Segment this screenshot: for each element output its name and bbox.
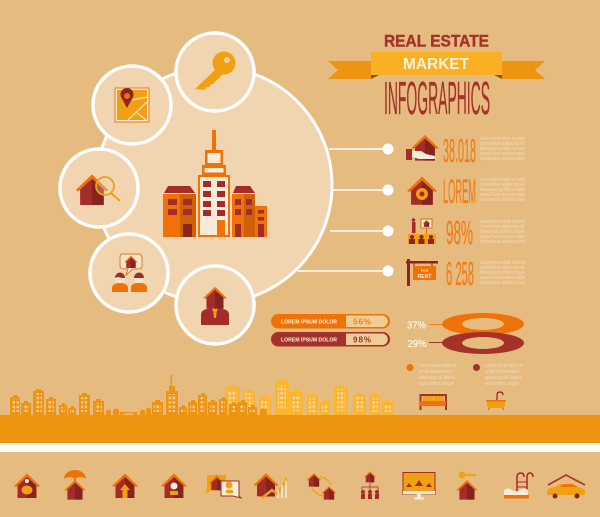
icon: map with pin — [115, 88, 149, 122]
list item: 38.018: 38.018 — [443, 132, 476, 169]
description: sed pulvinar ultricies purus — [480, 239, 525, 245]
progress bar: 56%: 56% — [353, 318, 371, 326]
connector dots — [382, 144, 394, 276]
description: massa Fusce posuere magna — [480, 275, 525, 281]
icon: house with magnifier — [76, 174, 120, 205]
description: consectetuer adipiscing elit. — [480, 265, 525, 271]
description — [480, 136, 525, 162]
satellite circles — [60, 33, 254, 344]
description: consectetuer adipiscing elit. — [480, 224, 525, 230]
progress bar: 56% — [271, 314, 390, 328]
hub diagram: main circle with satellites — [60, 33, 394, 344]
description: Lorem ipsum dolor sit amet — [480, 219, 525, 225]
legend: orange: amet consectetuer — [419, 369, 453, 375]
icon: for rent sign — [406, 259, 438, 286]
description: Maecenas porttitor congue — [480, 270, 525, 276]
heading: market: MARKET — [403, 56, 470, 73]
ribbon — [328, 52, 545, 79]
icon: bed — [420, 394, 447, 410]
list item: 6 258: 6 258 — [446, 255, 474, 292]
legend: red: Lorem ipsum dolor sit — [485, 363, 523, 369]
description: Maecenas porttitor congue — [480, 229, 525, 235]
icon: exchange houses — [307, 473, 336, 500]
progress bar: 98% — [271, 332, 390, 346]
legend: red: amet consectetuer — [485, 369, 519, 375]
description: consectetuer adipiscing elit. — [480, 141, 525, 147]
icon: house with piggy bank — [14, 474, 40, 498]
orange ground band — [0, 415, 600, 443]
legend: red: nas porttitor congue — [485, 381, 519, 387]
list item: 38.018 — [406, 132, 525, 169]
description: Maecenas porttitor congue — [480, 146, 525, 152]
description — [480, 177, 525, 203]
icon: for rent sign: RENT — [417, 274, 432, 280]
description: sed pulvinar ultricies purus — [480, 156, 525, 162]
description: Lorem ipsum dolor sit amet — [480, 260, 525, 266]
city skyline: light buildings — [225, 380, 393, 415]
icon: house under umbrella — [64, 470, 86, 500]
description: massa Fusce posuere magna — [480, 234, 525, 240]
progress bar: 98%: LOREM IPSUM DOLOR — [281, 338, 337, 344]
description — [480, 219, 525, 245]
icon: city buildings — [163, 130, 267, 237]
central tower — [198, 130, 230, 237]
bottom icon row — [14, 470, 585, 500]
ring chart — [407, 313, 524, 354]
legend: red — [473, 363, 523, 387]
list item: 6 258 — [406, 255, 525, 292]
ring: 29%: 29% — [408, 339, 427, 350]
icon: house with gear — [407, 177, 437, 205]
icon: car under roof — [547, 475, 585, 498]
progress bar: 98%: 98% — [353, 336, 371, 344]
list item: LOREM: LOREM — [443, 173, 476, 211]
white strip — [0, 443, 600, 452]
icon: organization of people — [361, 471, 379, 499]
left building — [163, 186, 196, 237]
right buildings — [232, 186, 267, 237]
description: sed pulvinar ultricies purus — [480, 197, 525, 203]
icon: bathtub — [486, 392, 506, 410]
icon: monitor with houses — [403, 472, 435, 500]
icon: agent with house head — [201, 287, 229, 325]
icon: chat with house and coin — [205, 475, 241, 498]
icon: house in hand — [406, 135, 439, 161]
description: massa Fusce posuere magna — [480, 151, 525, 157]
legend: orange — [406, 363, 456, 387]
description — [480, 260, 525, 286]
connector lines to list — [298, 149, 388, 271]
icon: swimming pool — [504, 473, 533, 498]
description: sed pulvinar ultricies purus — [480, 280, 525, 286]
description: Maecenas porttitor congue — [480, 187, 525, 193]
icon: house with arrow — [112, 474, 138, 498]
description: Lorem ipsum dolor sit amet — [480, 177, 525, 183]
icon: for rent sign: FOR — [421, 269, 429, 273]
list item: 98% — [408, 214, 525, 251]
legend: orange: nas porttitor congue — [419, 381, 454, 387]
description: consectetuer adipiscing elit. — [480, 182, 525, 188]
legend: orange: Lorem ipsum dolor sit — [419, 363, 456, 369]
city skyline: dark buildings — [10, 375, 267, 415]
description: Lorem ipsum dolor sit amet — [480, 136, 525, 142]
list item: 98%: 98% — [446, 214, 473, 251]
heading: real estate: REAL ESTATE — [384, 32, 489, 50]
icon: key — [195, 52, 236, 90]
legend: orange: adipiscing elit. Maece — [419, 375, 455, 381]
title block — [328, 32, 545, 124]
legend: red: adipiscing elit. Maece — [485, 375, 522, 381]
main circle — [96, 67, 332, 303]
description: massa Fusce posuere magna — [480, 192, 525, 198]
icon: house with coin — [161, 474, 187, 498]
list item: LOREM — [407, 173, 525, 211]
icon: presentation — [408, 218, 436, 244]
ring: 37%: 37% — [407, 320, 426, 332]
icon: house with growth chart — [254, 473, 287, 498]
icon: clients with speech bubble — [112, 254, 147, 292]
icon: key above house — [457, 472, 477, 500]
progress bar: 56%: LOREM IPSUM DOLOR — [281, 320, 337, 326]
